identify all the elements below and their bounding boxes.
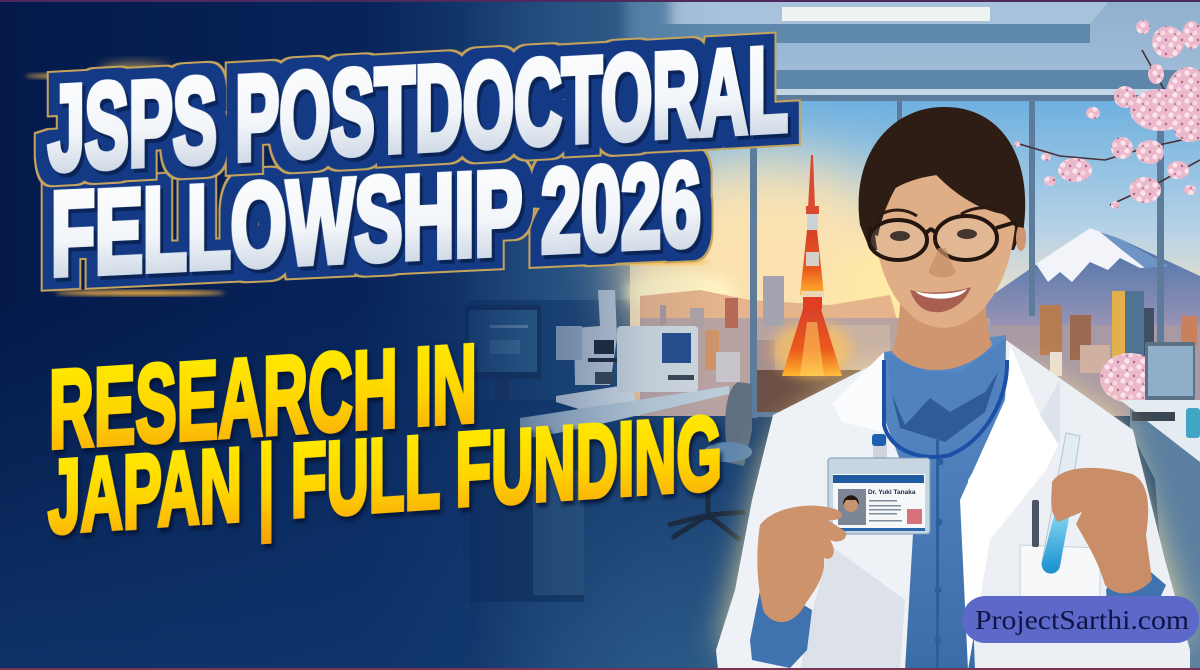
gold lens flares <box>25 64 710 296</box>
lab equipment on the desk <box>400 268 752 602</box>
eyes <box>890 229 977 241</box>
left hand <box>757 506 846 622</box>
scientist <box>716 107 1190 670</box>
card name: Dr. Yuki Tanaka <box>868 489 916 496</box>
lab analyser <box>617 326 698 392</box>
right workstation <box>1120 342 1200 670</box>
right hand <box>1051 468 1152 593</box>
pocket and pen <box>1020 500 1100 640</box>
golden glow around scientist <box>720 370 1190 650</box>
face <box>874 174 1016 328</box>
collar <box>886 338 1006 425</box>
right sleeve <box>1106 550 1166 612</box>
cherry blossom branches <box>1014 20 1200 209</box>
lab coat <box>716 340 1190 670</box>
cherry blossom low <box>1100 353 1160 403</box>
id card <box>828 434 930 534</box>
microscope <box>556 290 636 410</box>
website badge: ProjectSarthi.com <box>975 605 1189 635</box>
lanyard <box>884 360 1007 457</box>
office chair <box>668 382 752 540</box>
button placket <box>934 440 944 670</box>
neck <box>892 300 992 370</box>
desk <box>520 386 729 440</box>
mount fuji <box>985 228 1200 345</box>
distant hills <box>640 290 900 330</box>
hair fringe <box>865 125 1024 236</box>
hair back <box>859 107 1025 250</box>
smile <box>910 287 971 312</box>
window frames <box>640 95 1200 418</box>
lab monitor <box>465 305 541 401</box>
website badge <box>962 596 1199 643</box>
lower navy lift <box>0 300 470 670</box>
eyebrows <box>878 208 1005 216</box>
test tube <box>1042 433 1080 573</box>
title: JSPS Postdoctoral Fellowship 2026 <box>25 22 788 301</box>
window view: sky and skyline <box>620 96 1200 416</box>
subtitle line 1: RESEARCH IN <box>49 322 477 472</box>
title line 2: FELLOWSHIP 2026 <box>51 138 701 301</box>
subtitle: Research in Japan | Full Funding <box>48 322 722 557</box>
shirt <box>880 335 1008 670</box>
nose shadow <box>929 248 956 278</box>
tokyo tower <box>772 155 852 378</box>
glasses <box>868 216 1016 260</box>
city skyline <box>640 276 1200 416</box>
left sleeve <box>750 580 812 668</box>
